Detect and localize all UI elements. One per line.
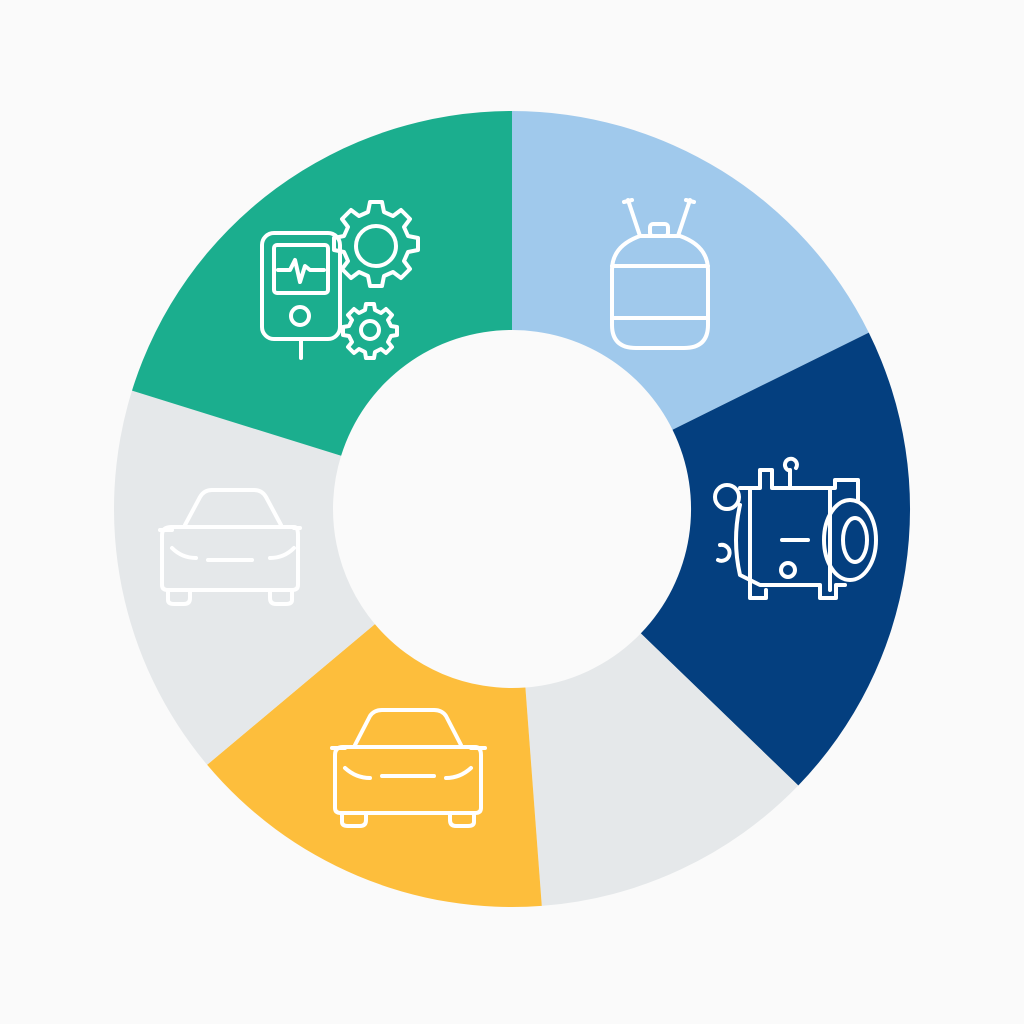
icon: diagnostic meter and gears (262, 202, 418, 358)
segment: grey bottom right (525, 633, 798, 906)
segment: green diagnostics (132, 111, 512, 456)
segment: light blue refrigerant (512, 111, 869, 430)
icon: car grey (160, 490, 300, 604)
segment: yellow car (207, 624, 542, 907)
segment: navy compressor (641, 333, 910, 786)
segment: grey car (114, 391, 375, 765)
icon: refrigerant tank (612, 200, 708, 348)
icon: car yellow (332, 710, 485, 826)
icon: compressor (715, 459, 876, 598)
